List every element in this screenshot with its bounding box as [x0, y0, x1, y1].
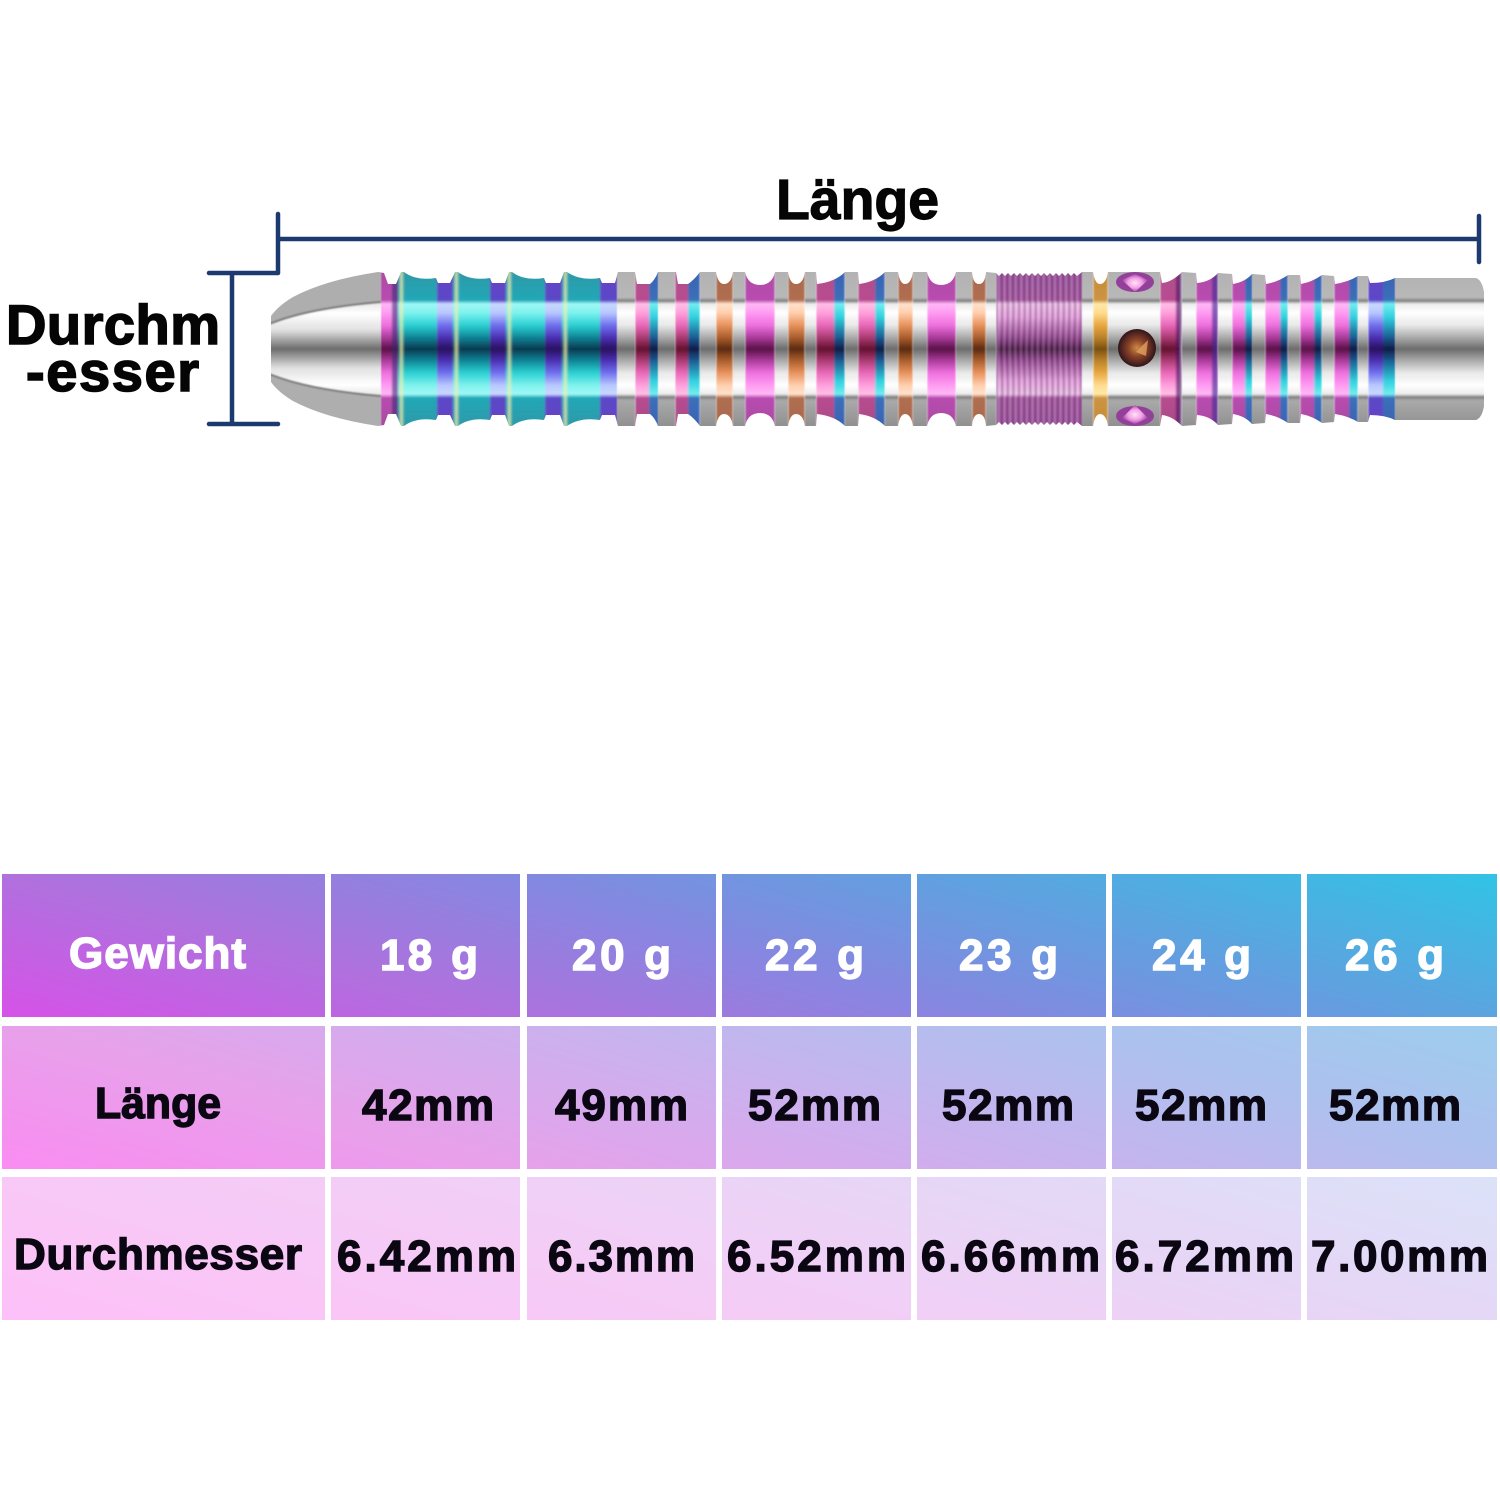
- heading: Durchmesser dimension label: -esser: [26, 340, 199, 403]
- cell: 6.72mm: 6.72mm: [1115, 1232, 1294, 1281]
- icon: centre grip hole: [1118, 329, 1156, 367]
- cell: 52mm: 52mm: [942, 1081, 1074, 1130]
- row: Durchmesser: [2, 1177, 1497, 1320]
- cell: 52mm: [722, 1026, 911, 1169]
- icon: bottom grip hole: [1116, 405, 1154, 426]
- cell: 52mm: 52mm: [1135, 1081, 1267, 1130]
- cell: 6.52mm: 6.52mm: [727, 1232, 906, 1281]
- heading: Durchmesser dimension label: Durchm: [6, 293, 220, 356]
- cell: 42mm: 42mm: [362, 1081, 494, 1130]
- heading: Durchmesser dimension label: [6, 293, 220, 403]
- cell: 18 g: 18 g: [380, 931, 478, 980]
- cell: 23 g: [917, 874, 1106, 1017]
- dart barrel illustration: [266, 268, 1487, 430]
- length dimension arrow: [278, 214, 1479, 272]
- cell: 26 g: [1307, 874, 1497, 1017]
- icon: top grip hole: [1116, 272, 1154, 292]
- cell: 6.66mm: 6.66mm: [921, 1232, 1100, 1281]
- cell: 52mm: 52mm: [1329, 1081, 1461, 1130]
- specification table: [2, 874, 1497, 1320]
- cell: 24 g: [1112, 874, 1301, 1017]
- cell: 6.66mm: [917, 1177, 1106, 1320]
- cell: 52mm: [1307, 1026, 1497, 1169]
- cell: 23 g: 23 g: [959, 931, 1058, 980]
- cell: 26 g: 26 g: [1345, 931, 1444, 980]
- cell: 6.3mm: [527, 1177, 716, 1320]
- header cell: Durchmesser: Durchmesser: [14, 1230, 302, 1279]
- header cell: Länge: Länge: [95, 1079, 221, 1128]
- cell: 52mm: [1112, 1026, 1301, 1169]
- diameter dimension arrow: [209, 273, 278, 424]
- header cell: Länge: [2, 1026, 325, 1169]
- barrel coloured bands: [380, 270, 1396, 428]
- cell: 22 g: [722, 874, 911, 1017]
- cell: 22 g: 22 g: [765, 931, 864, 980]
- cell: 49mm: 49mm: [555, 1081, 688, 1130]
- header cell: Durchmesser: [2, 1177, 325, 1320]
- cell: 6.72mm: [1112, 1177, 1301, 1320]
- barrel nose tip: [266, 268, 381, 430]
- cell: 20 g: 20 g: [572, 931, 671, 980]
- header cell: Gewicht: Gewicht: [69, 929, 246, 978]
- cell: 24 g: 24 g: [1152, 931, 1251, 980]
- header cell: Gewicht: [2, 874, 325, 1017]
- row: Länge: [2, 1026, 1497, 1169]
- cell: 6.52mm: [722, 1177, 911, 1320]
- cell: 52mm: 52mm: [748, 1081, 881, 1130]
- cell: 7.00mm: [1307, 1177, 1497, 1320]
- barrel silver collars: [617, 270, 1487, 428]
- cell: 6.42mm: [331, 1177, 520, 1320]
- cell: 20 g: [527, 874, 716, 1017]
- cell: 6.3mm: 6.3mm: [548, 1232, 695, 1281]
- cell: 52mm: [917, 1026, 1106, 1169]
- heading: Länge dimension label: Länge: [776, 168, 939, 232]
- cell: 18 g: [331, 874, 520, 1017]
- cell: 42mm: [331, 1026, 520, 1169]
- cell: 6.42mm: 6.42mm: [337, 1232, 516, 1281]
- row: Gewicht: [2, 874, 1497, 1017]
- cell: 49mm: [527, 1026, 716, 1169]
- cell: 7.00mm: 7.00mm: [1311, 1232, 1488, 1281]
